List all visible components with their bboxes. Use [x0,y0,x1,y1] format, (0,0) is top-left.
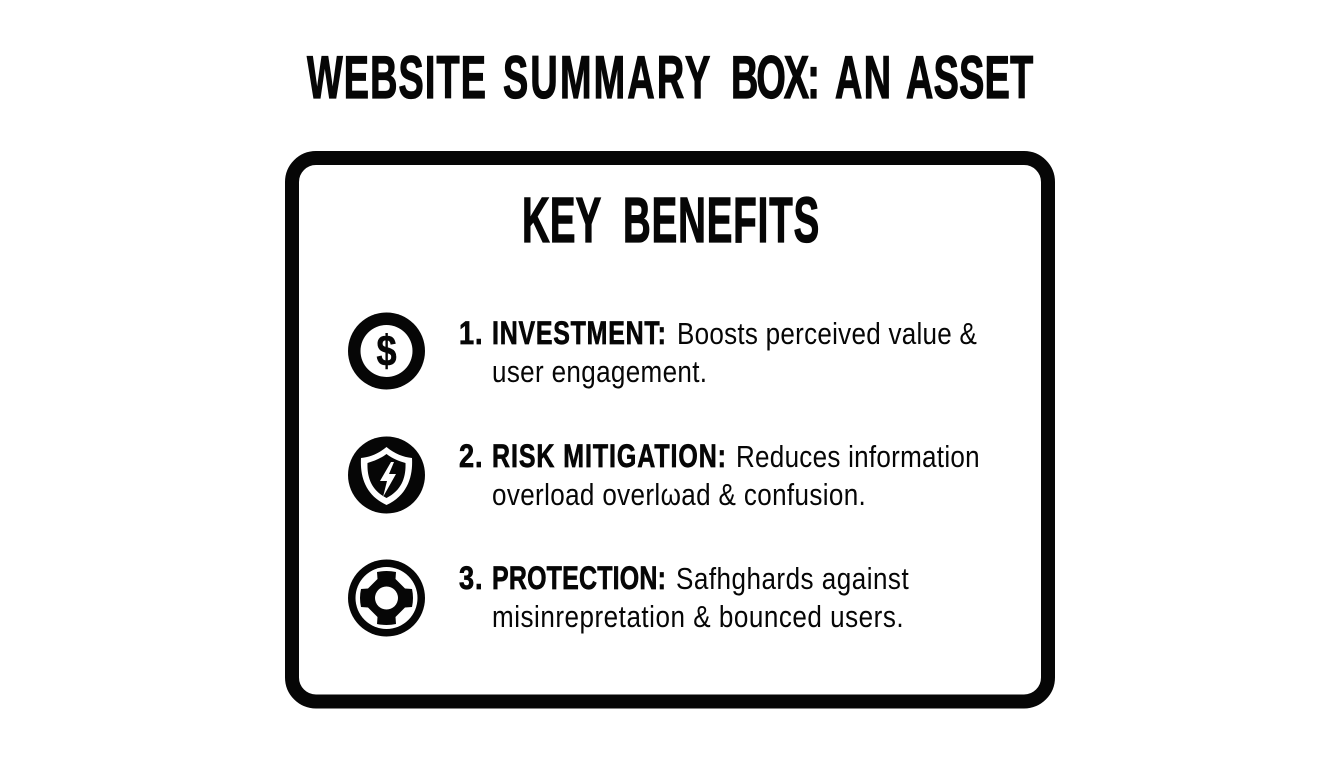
title: SUMMARY [503,44,710,111]
title: AN [835,44,891,111]
title: WEBSITE [307,44,486,111]
item 3: protection: 3. [459,561,483,597]
item 2: risk mitigation: overload overlωad & confusion. [492,478,866,513]
item 1: investment [459,316,977,390]
title: ASSET [906,44,1034,111]
panel heading: BENEFITS [623,185,819,257]
icon: dollar coin [348,312,425,390]
icon: protection cross [348,560,425,636]
panel heading: KEY [522,185,601,257]
item 1: investment: Boosts perceived value & [677,317,977,352]
title [307,44,1034,111]
panel heading [522,185,819,257]
item 3: protection: PROTECTION: [492,561,666,597]
item 2: risk mitigation: RISK MITIGATION: [492,439,726,475]
item 1: investment: 1. [459,316,483,352]
panel: key benefits [292,158,1048,702]
icon: dollar coin: $ [376,327,397,376]
item 2: risk mitigation: 2. [459,439,483,475]
item 2: risk mitigation [459,439,980,513]
item 1: investment: INVESTMENT: [492,316,666,352]
title: BOX: [731,44,820,111]
item 3: protection: misinrepretation & bounced users. [492,600,904,635]
item 3: protection: Safhghards against [676,562,909,597]
icon: shield with lightning bolt [348,436,425,514]
item 3: protection [459,561,909,635]
item 1: investment: user engagement. [492,355,707,390]
item 2: risk mitigation: Reduces information [736,440,980,475]
